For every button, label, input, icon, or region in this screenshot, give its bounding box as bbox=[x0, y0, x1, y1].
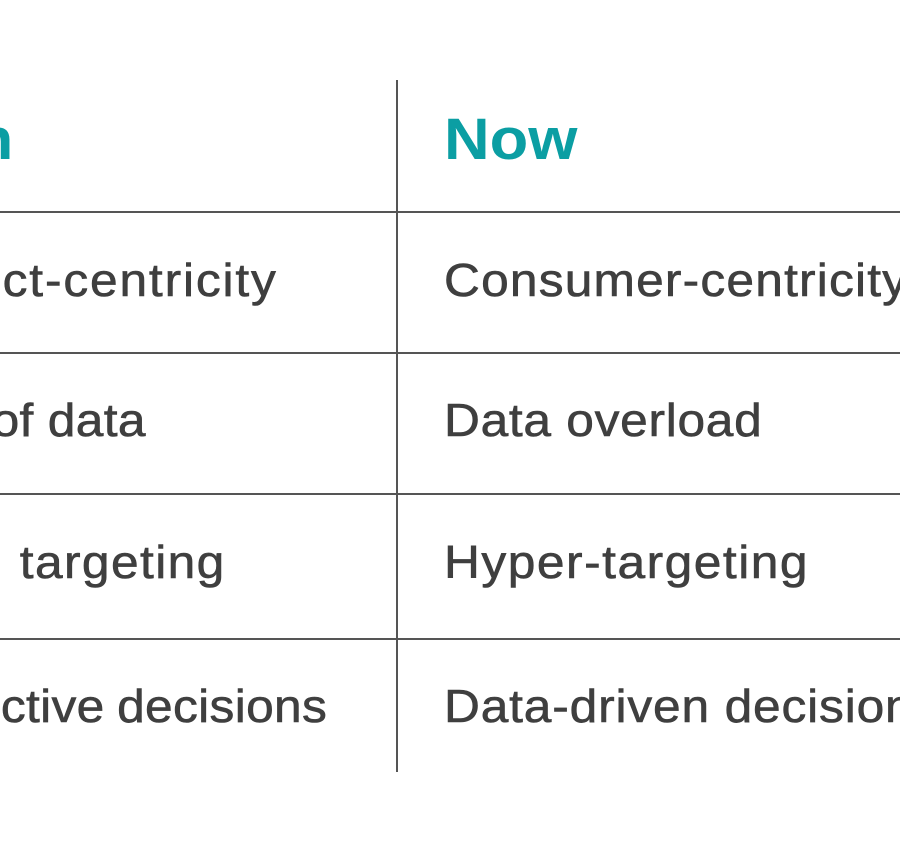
row 4 then: ctive decisions bbox=[1, 680, 327, 732]
row 3 then: targeting bbox=[20, 536, 226, 588]
row 1 now: Consumer-centricity bbox=[444, 254, 900, 306]
row 3 now: Hyper-targeting bbox=[444, 536, 809, 588]
row 1 then: ct-centricity bbox=[3, 254, 278, 306]
row 2 now: Data overload bbox=[444, 394, 762, 446]
heading: now: Now bbox=[444, 107, 577, 172]
